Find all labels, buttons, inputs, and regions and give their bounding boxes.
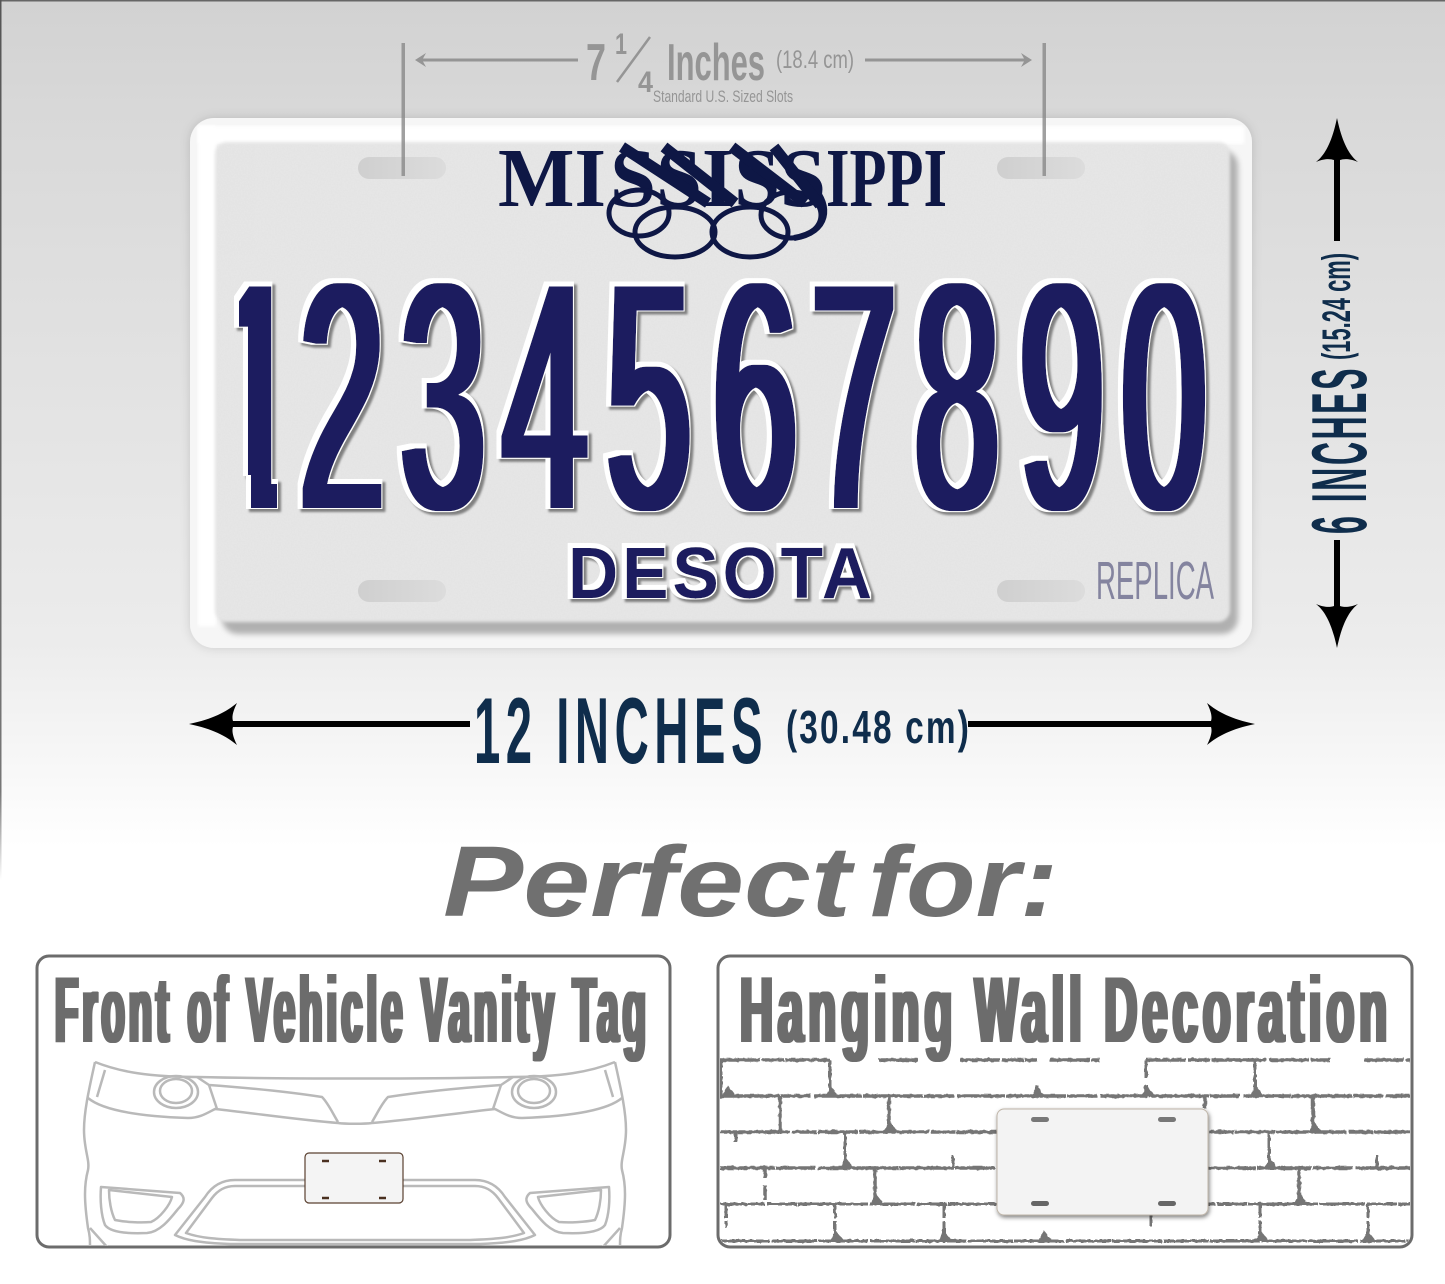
mounting slots	[358, 157, 1085, 602]
county name: DESOTA	[568, 534, 876, 614]
heading: Perfect for	[443, 826, 1058, 938]
slot spacing dimension: Standard U.S. Sized Slots	[653, 87, 793, 106]
plate on wall	[997, 1109, 1208, 1215]
slot spacing dimension: 1	[615, 28, 627, 61]
width dimension	[189, 678, 1255, 783]
plate number: 3	[401, 218, 485, 577]
width dimension: 12 INCHES	[474, 678, 768, 783]
mini plate on car	[305, 1153, 403, 1203]
slot spacing dimension: Inches	[667, 34, 765, 92]
panel: hanging wall decoration	[718, 956, 1412, 1247]
license plate: 0	[1122, 218, 1206, 577]
panel: front of vehicle	[37, 956, 670, 1248]
plate number: 5	[607, 218, 691, 577]
slot spacing dimension: 4	[638, 66, 653, 99]
plate number: 7	[812, 218, 896, 577]
width dimension: (30.48 cm)	[786, 701, 971, 753]
brick wall	[720, 1060, 1412, 1241]
plate state logo: Mississippi	[498, 132, 947, 257]
plate state logo: Mississippi: SSISS	[610, 132, 826, 225]
plate number: 1	[215, 218, 299, 577]
height dimension: (15.24 cm)	[1315, 253, 1359, 360]
plate state logo: Mississippi: IPPI	[826, 132, 947, 225]
plate number: 2	[300, 218, 384, 577]
slot spacing dimension: (18.4 cm)	[776, 46, 854, 74]
plate number: 4	[503, 218, 587, 577]
replica mark: REPLICA	[1096, 551, 1214, 611]
plate number: 6	[713, 218, 797, 577]
heading: Perfect for: Perfect	[443, 826, 855, 938]
car front outline	[84, 1062, 626, 1248]
plate number: 8	[915, 218, 999, 577]
license plate	[190, 118, 1252, 648]
heading: Perfect for: for:	[868, 826, 1058, 938]
slot spacing dimension: 7	[586, 34, 606, 92]
slot spacing dimension	[402, 28, 1046, 176]
height dimension: 6 INCHES	[1295, 366, 1383, 534]
plate number	[234, 278, 1210, 516]
plate state logo: Mississippi: MI	[498, 132, 606, 225]
plate number: 9	[1020, 218, 1104, 577]
